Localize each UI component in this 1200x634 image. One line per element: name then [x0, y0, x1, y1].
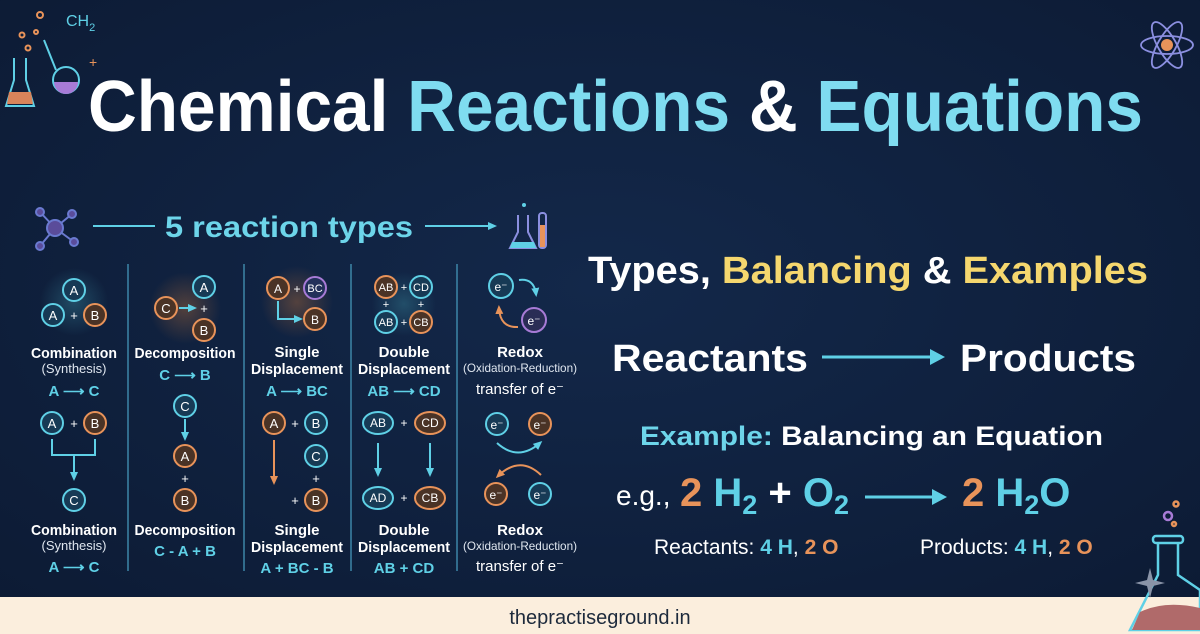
- panel: single displacement: A ⟶ BC: [266, 383, 328, 400]
- atom count: [654, 536, 1093, 559]
- panel: double displacement: AB: [379, 317, 393, 329]
- panel: combination: A ⟶ C: [49, 383, 100, 400]
- panel: combination: Combination: [31, 345, 117, 362]
- panel: double displacement: +: [400, 416, 408, 430]
- icon: flask bottom-right: [1130, 502, 1200, 630]
- panel: decomposition: [134, 272, 236, 560]
- icon: test tubes: [510, 203, 546, 248]
- panel: redox: (Oxidation-Reduction): [463, 539, 577, 553]
- panel: redox: e⁻: [494, 280, 508, 294]
- reactants to products: Reactants: [612, 338, 808, 380]
- panel: combination: (Synthesis): [41, 361, 107, 376]
- column dividers: [128, 264, 457, 571]
- panel: combination: +: [70, 308, 78, 323]
- panel: redox: e⁻: [533, 418, 547, 432]
- equation: O: [1039, 471, 1070, 515]
- panel: decomposition: +: [181, 471, 189, 486]
- panel: double displacement: AB: [370, 416, 386, 430]
- panel: decomposition: +: [200, 301, 208, 316]
- equation: 2: [834, 490, 849, 520]
- panel: redox: e⁻: [489, 488, 503, 502]
- panel: single displacement: B: [312, 493, 320, 508]
- panel: single displacement: A + BC - B: [260, 560, 334, 577]
- panel: redox: e⁻: [533, 488, 547, 502]
- panel: double displacement: CB: [422, 491, 438, 505]
- equation: 2: [1024, 490, 1039, 520]
- panel: double displacement: +: [383, 299, 389, 311]
- panel: single displacement: Displacement: [251, 539, 343, 556]
- title: Chemical Reactions & Equations: [88, 67, 1143, 147]
- panel: double displacement: AD: [370, 491, 387, 505]
- icon: flasks top-left: 2: [89, 22, 95, 34]
- panel: double displacement: [358, 272, 450, 577]
- panel: double displacement: Displacement: [358, 539, 450, 556]
- panel: redox: Redox: [497, 522, 544, 539]
- panel: double displacement: Displacement: [358, 361, 450, 378]
- panel: decomposition: B: [200, 323, 208, 338]
- panel: redox: (Oxidation-Reduction): [463, 361, 577, 375]
- panel: single displacement: Single: [274, 344, 320, 361]
- panel: combination: A: [48, 416, 57, 431]
- panel: decomposition: A: [200, 280, 209, 295]
- panel: single displacement: BC: [307, 283, 323, 295]
- panel: combination: Combination: [31, 522, 117, 539]
- panel: single displacement: +: [312, 471, 320, 486]
- panel: double displacement: +: [401, 282, 407, 294]
- example heading: Example: Balancing an Equation: [640, 421, 1103, 451]
- panel: double displacement: +: [400, 491, 408, 505]
- panel: combination: B: [91, 416, 99, 431]
- panel: double displacement: AB: [379, 282, 393, 294]
- panel: single displacement: A: [270, 416, 279, 431]
- panel: combination: A: [49, 308, 58, 323]
- reactants to products: [612, 338, 1136, 380]
- subtitle: types balancing examples: Types, Balancing & Examples: [588, 250, 1148, 292]
- panel: combination: A ⟶ C: [49, 559, 100, 576]
- equation: 2 H: [962, 471, 1024, 515]
- panel: decomposition: Decomposition: [134, 345, 236, 362]
- panel: single displacement: B: [312, 416, 320, 431]
- panel: decomposition: C - A + B: [154, 543, 216, 560]
- icon: flasks top-left: +: [89, 54, 97, 70]
- panel: double displacement: CB: [413, 317, 429, 329]
- panel: combination: [31, 268, 117, 576]
- panel: redox: e⁻: [490, 418, 504, 432]
- panel: decomposition: Decomposition: [134, 522, 236, 539]
- panel: decomposition: C: [180, 399, 190, 414]
- panel: combination: A: [70, 283, 79, 298]
- panel: double displacement: AB + CD: [374, 560, 434, 577]
- panel: decomposition: B: [181, 493, 189, 508]
- panel: single displacement: +: [291, 416, 299, 431]
- panel: single displacement: +: [293, 282, 301, 296]
- panel: single displacement: C: [311, 449, 321, 464]
- equation: e.g.,: [616, 480, 670, 511]
- icon: flasks top-left: CH: [66, 13, 89, 30]
- atom count: Reactants: 4 H, 2 O: [654, 536, 838, 559]
- icon: flasks top-left: [6, 12, 97, 106]
- equation: 2: [742, 490, 757, 520]
- panel: decomposition: C: [161, 301, 171, 316]
- heading: 5 reaction types: 5 reaction types: [165, 211, 413, 244]
- panel: double displacement: AB ⟶ CD: [367, 383, 441, 400]
- panel: combination: C: [69, 493, 79, 508]
- footer: [0, 597, 1200, 634]
- panel: decomposition: A: [181, 449, 190, 464]
- panel: combination: +: [70, 416, 78, 431]
- panel: single displacement: B: [311, 313, 319, 327]
- panel: redox: transfer of e⁻: [476, 558, 564, 575]
- panel: single displacement: [251, 266, 343, 577]
- panel: single displacement: Displacement: [251, 361, 343, 378]
- panel: redox: transfer of e⁻: [476, 381, 564, 398]
- panel: double displacement: Double: [379, 344, 429, 361]
- equation: O: [803, 471, 834, 515]
- panel: double displacement: CD: [421, 416, 439, 430]
- panel: single displacement: A: [274, 282, 282, 296]
- reactants to products: Products: [960, 338, 1136, 380]
- panel: combination: (Synthesis): [41, 538, 107, 553]
- panel: single displacement: +: [291, 493, 299, 508]
- panel: redox: [463, 274, 577, 575]
- equation: 2 H: [680, 471, 742, 515]
- panel: double displacement: +: [401, 317, 407, 329]
- atom count: Products: 4 H, 2 O: [920, 536, 1093, 559]
- equation: [616, 471, 1070, 520]
- panel: decomposition: C ⟶ B: [159, 367, 211, 384]
- panel: single displacement: Single: [274, 522, 320, 539]
- footer: thepractiseground.in: [509, 607, 691, 629]
- panel: redox: Redox: [497, 344, 544, 361]
- panel: double displacement: Double: [379, 522, 429, 539]
- panel: double displacement: CD: [413, 282, 429, 294]
- panel: redox: e⁻: [527, 314, 541, 328]
- panel: combination: B: [91, 308, 99, 323]
- equation: +: [757, 471, 803, 515]
- icon: atom top-right: [1141, 18, 1193, 72]
- icon: molecule: [36, 208, 78, 250]
- panel: double displacement: +: [418, 299, 424, 311]
